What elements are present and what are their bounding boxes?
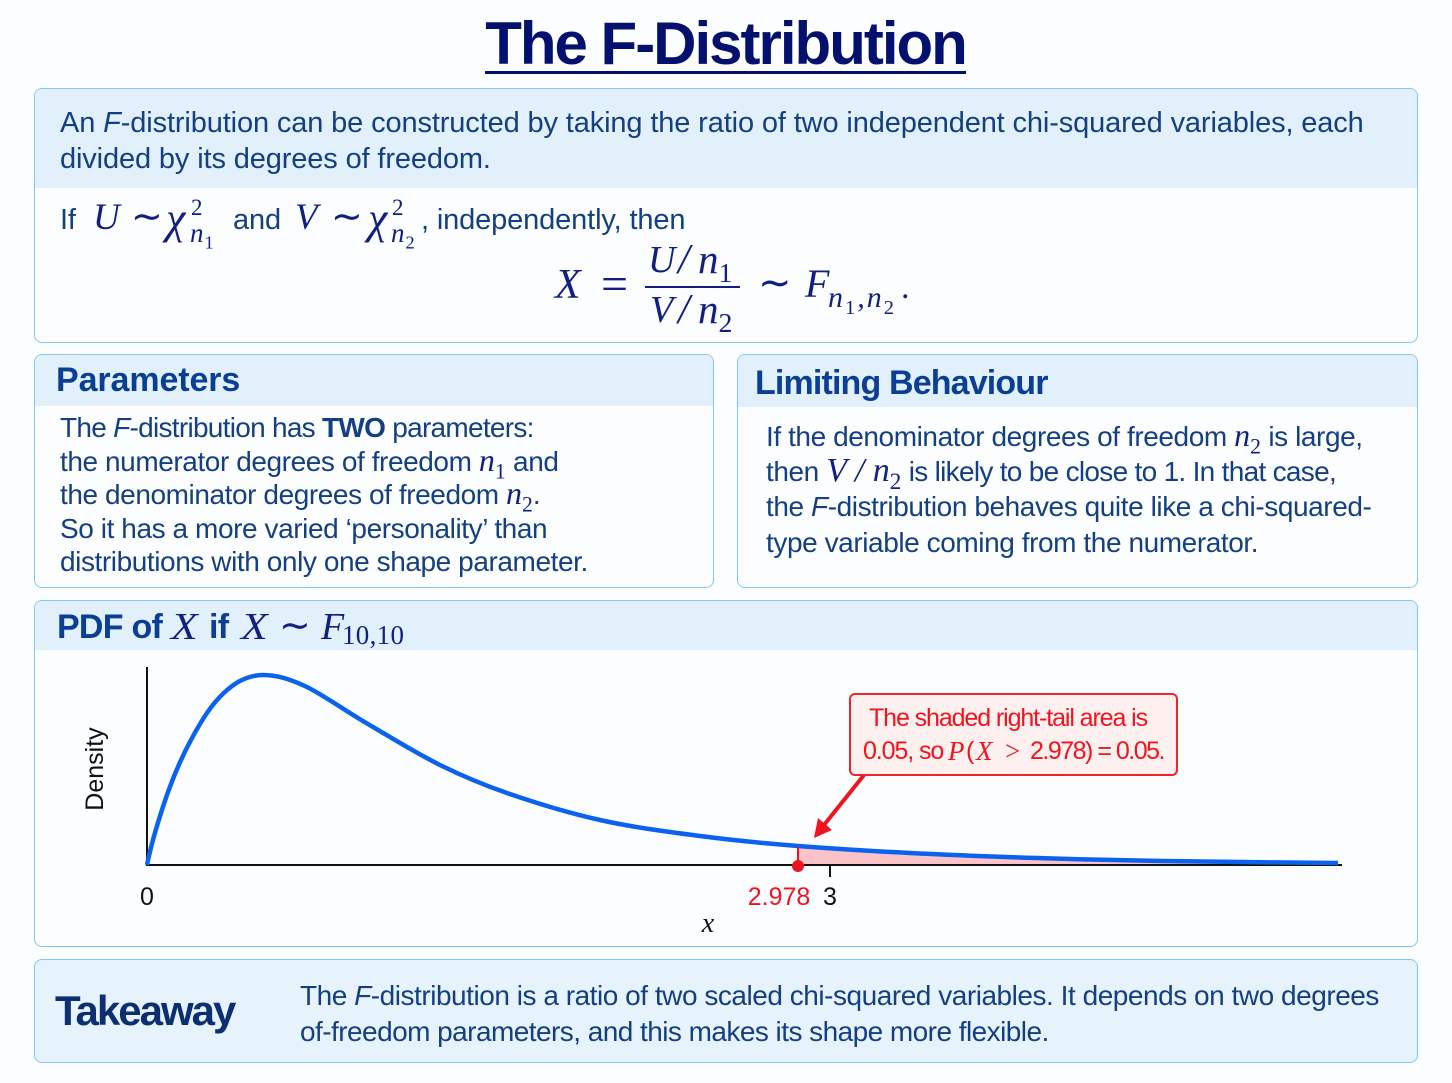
callout line 2: > <box>1005 736 1020 766</box>
takeaway text: of-freedom parameters, and this makes its shape more flexible. <box>300 1016 1049 1046</box>
formula: n1,n2 <box>828 281 896 319</box>
chart heading: PDF of <box>57 608 162 646</box>
callout line 2: 0.05, so <box>863 737 943 765</box>
parameters text: distributions with only one shape parameter. <box>60 546 588 577</box>
formula: / <box>678 237 690 283</box>
callout line 1: The shaded right-tail area is <box>869 704 1147 732</box>
condition text: χ <box>166 194 185 243</box>
condition text: χ <box>368 194 387 243</box>
density curve <box>147 675 1338 865</box>
axis labels: 0 <box>140 883 154 911</box>
axis labels: x <box>701 908 715 939</box>
formula: V <box>650 289 673 331</box>
limiting behaviour text: the F-distribution behaves quite like a chi-squared- <box>766 491 1371 522</box>
condition text: , independently, then <box>421 204 685 236</box>
chart heading <box>57 605 404 650</box>
limiting behaviour text: then V / n2 is likely to be close to 1. In that case, <box>766 452 1336 495</box>
parameters text: So it has a more varied ‘personality’ than <box>60 513 547 544</box>
panel: limiting behaviour <box>737 354 1418 588</box>
condition text: V <box>295 197 318 238</box>
limiting behaviour text: type variable coming from the numerator. <box>766 527 1258 558</box>
formula: / <box>678 287 690 333</box>
parameters text <box>60 412 588 577</box>
chart heading: ∼ <box>279 605 311 647</box>
takeaway text: The F-distribution is a ratio of two scaled chi-squared variables. It depends on two degrees <box>300 980 1379 1011</box>
definition text: divided by its degrees of freedom. <box>60 142 491 174</box>
critical value marker <box>792 847 804 872</box>
limiting behaviour text: If the denominator degrees of freedom n2 is large, <box>766 417 1363 458</box>
parameters heading: Parameters <box>56 361 240 399</box>
callout <box>849 693 1178 776</box>
panel: pdf chart <box>34 600 1418 947</box>
chart heading: 10,10 <box>342 620 404 650</box>
condition and formula <box>60 194 910 339</box>
formula: X <box>555 262 581 308</box>
parameters text: the denominator degrees of freedom n2. <box>60 475 540 517</box>
panel: takeaway <box>34 959 1418 1063</box>
formula: = <box>601 258 628 311</box>
formula: n1 <box>698 236 732 289</box>
callout line 2: 2.978) = 0.05. <box>1030 737 1164 765</box>
parameters text: the numerator degrees of freedom n1 and <box>60 442 559 483</box>
callout line 2: P <box>948 736 964 766</box>
formula: ∼ <box>758 260 792 305</box>
formula: . <box>901 269 910 306</box>
formula: n2 <box>698 286 732 339</box>
limiting behaviour heading: Limiting Behaviour <box>755 364 1048 402</box>
panel: parameters <box>34 354 714 588</box>
panel: definition <box>34 88 1418 343</box>
pdf chart <box>81 667 1342 939</box>
chart heading: X <box>171 606 198 648</box>
chart heading: if <box>209 608 228 646</box>
condition text: n2 <box>391 218 416 252</box>
axes <box>147 667 1342 877</box>
condition text: U <box>93 197 120 238</box>
condition text: 2 <box>392 195 404 220</box>
axis labels: 3 <box>823 883 837 911</box>
formula: F <box>805 261 829 306</box>
takeaway text <box>300 980 1379 1047</box>
condition text: and <box>233 204 281 236</box>
axis labels: 2.978 <box>748 883 810 911</box>
formula: U <box>648 239 675 281</box>
condition text <box>60 194 685 252</box>
shaded tail area <box>798 847 1338 865</box>
takeaway heading: Takeaway <box>55 987 234 1034</box>
condition text: ∼ <box>331 196 363 238</box>
chart heading: X <box>241 606 268 648</box>
callout line 2 <box>863 736 1164 766</box>
parameters text: The F-distribution has TWO parameters: <box>60 412 534 443</box>
definition text <box>60 107 1364 174</box>
limiting behaviour text <box>766 417 1371 558</box>
title: The F-Distribution <box>485 10 966 77</box>
definition text: An F-distribution can be constructed by taking the ratio of two independent chi-squared variables, each <box>60 107 1364 139</box>
axis labels <box>81 727 837 939</box>
condition text: n1 <box>190 218 215 252</box>
formula <box>554 236 910 339</box>
callout line 2: ( <box>966 737 974 765</box>
condition text: ∼ <box>131 196 163 238</box>
axis labels: Density <box>81 727 109 811</box>
chart heading: F <box>321 606 344 648</box>
callout line 2: X <box>976 736 992 766</box>
condition text: 2 <box>191 195 202 220</box>
condition text: If <box>60 204 76 236</box>
arrow <box>814 775 864 838</box>
